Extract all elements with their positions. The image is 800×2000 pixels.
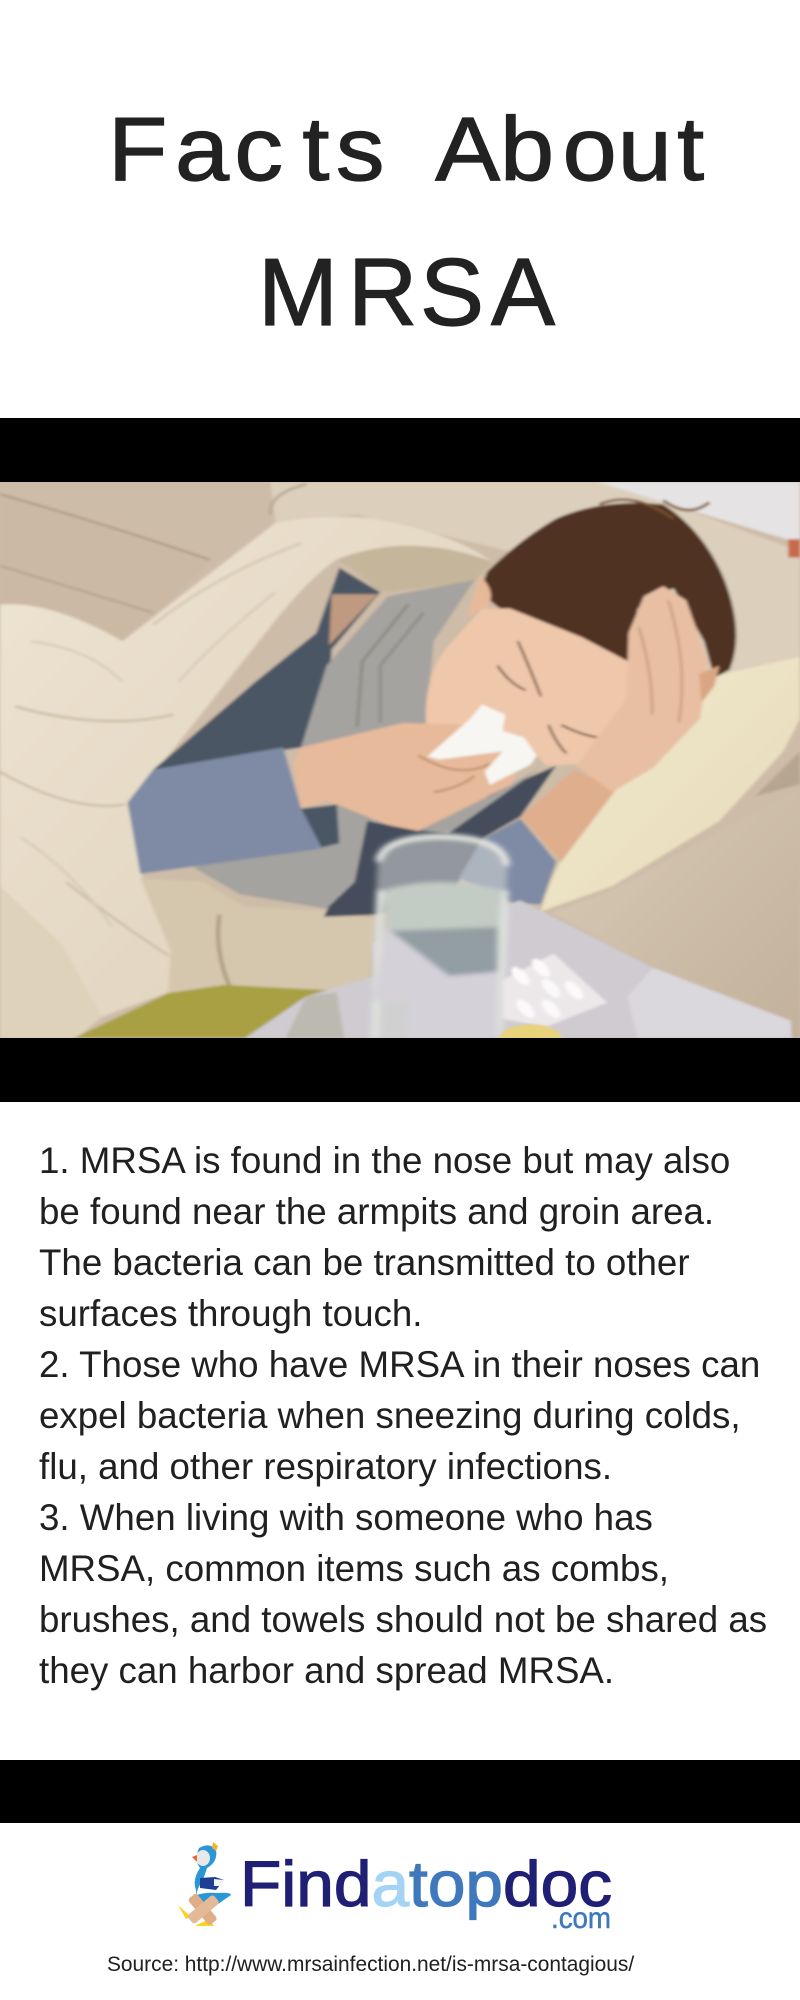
temple hand — [577, 586, 708, 792]
side table — [245, 900, 792, 1038]
icon: duck mascot with bandage — [178, 1842, 231, 1926]
dark shirt lower — [324, 766, 556, 917]
dark shirt upper — [153, 568, 380, 770]
blanket — [0, 517, 492, 1038]
top black band — [0, 418, 800, 482]
title: MRSA — [258, 239, 555, 346]
middle black band — [0, 1038, 800, 1102]
glass of water — [370, 835, 508, 1038]
facts text block: surfaces through touch. — [39, 1293, 422, 1334]
facts text block: 1. MRSA is found in the nose but may also — [39, 1140, 730, 1181]
logo: Findatopdoc.com: .com — [551, 1902, 611, 1935]
facts text block: expel bacteria when sneezing during colds, — [39, 1395, 741, 1436]
facts text block — [39, 1140, 767, 1691]
face features: brow and eyes — [497, 641, 597, 753]
facts text block: they can harbor and spread MRSA. — [39, 1650, 614, 1691]
lower beige blanket folds — [140, 878, 375, 993]
facts text block: brushes, and towels should not be shared as — [39, 1599, 767, 1640]
pillow — [541, 657, 800, 911]
bottom black band — [0, 1760, 800, 1823]
facts text block: 3. When living with someone who has — [39, 1497, 653, 1538]
blanket inner hood shadow — [337, 546, 492, 592]
right forearm — [520, 770, 617, 862]
face — [426, 609, 629, 766]
holding hand — [293, 723, 523, 831]
sofa background — [0, 478, 800, 1041]
facts text block: flu, and other respiratory infections. — [39, 1446, 612, 1487]
wall — [597, 482, 800, 543]
right sleeve — [459, 819, 556, 905]
olive cushion — [74, 985, 327, 1038]
tissue — [428, 704, 537, 785]
ear — [467, 575, 491, 617]
facts text block: MRSA, common items such as combs, — [39, 1548, 669, 1589]
scarf — [194, 580, 541, 909]
title: Facts About — [108, 98, 704, 199]
right sofa seat — [551, 788, 800, 1038]
photo: sick woman blowing her nose under a blanket — [0, 482, 800, 1038]
lemon slice — [499, 1025, 562, 1054]
facts text block: be found near the armpits and groin area. — [39, 1191, 714, 1232]
hair — [480, 503, 736, 678]
source line: Source: http://www.mrsainfection.net/is-mrsa-contagious/ — [107, 1953, 634, 1976]
facts text block: 2. Those who have MRSA in their noses can — [39, 1344, 760, 1385]
blister pack of pills — [503, 953, 607, 1027]
left sleeve — [128, 747, 339, 874]
logo: Findatopdoc.com: Findatopdoc — [240, 1850, 612, 1920]
facts text block: The bacteria can be transmitted to other — [39, 1242, 690, 1283]
title — [108, 98, 704, 346]
